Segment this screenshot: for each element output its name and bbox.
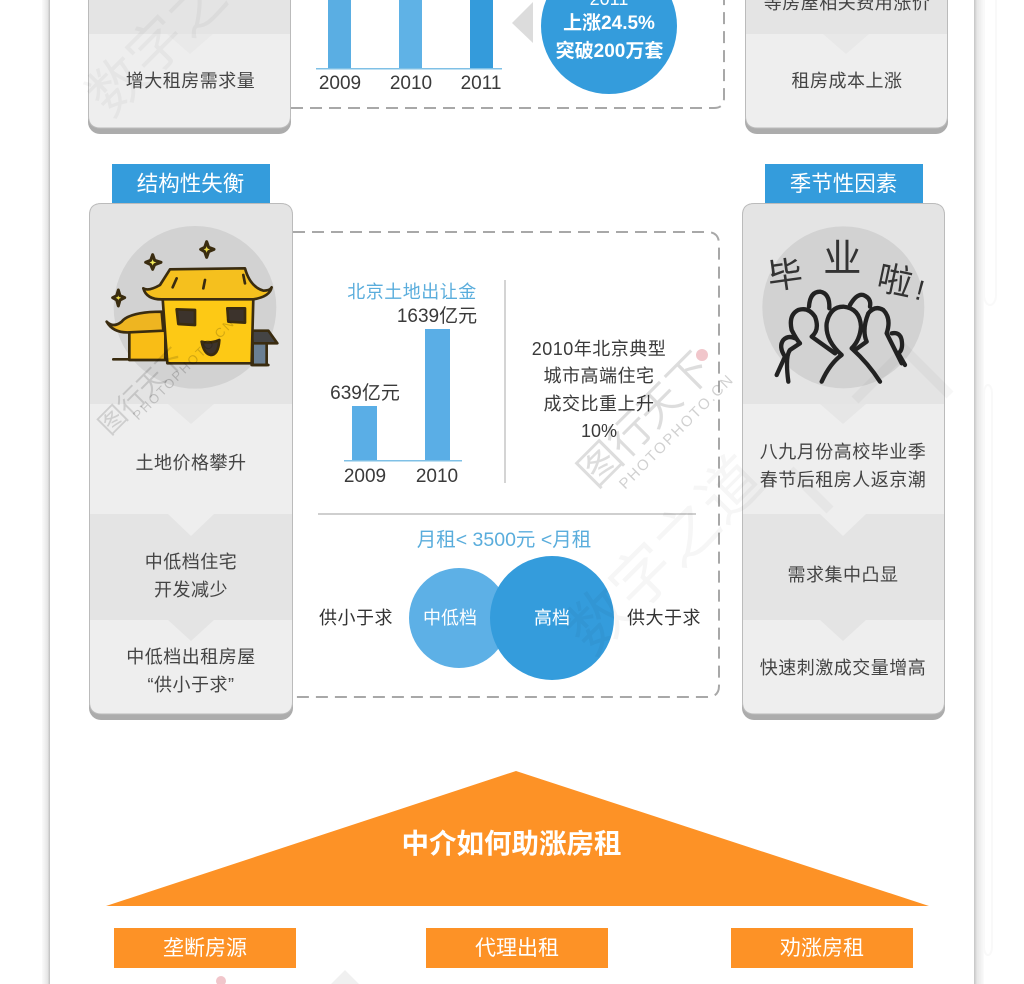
box: agency leasing: 代理出租 [475, 937, 559, 960]
text: boosts transaction volume: 快速刺激成交量增高 [760, 658, 926, 678]
heading: structural imbalance: 结构性失衡 [137, 172, 244, 196]
diagram: mid-low and high-end circles [319, 556, 701, 680]
text: land prices climb: 土地价格攀升 [136, 453, 246, 473]
dashed frame: middle section [293, 232, 719, 697]
text: high-end housing share: 10% [581, 421, 617, 441]
icon: graduates crowd: ! [912, 274, 928, 307]
divider vertical [504, 280, 506, 483]
text: high-end housing share: 成交比重上升 [544, 394, 654, 414]
watermarks: PHOTOPHOTO.CN [616, 371, 738, 493]
bar chart: Beijing land sales revenue: 2009 [344, 466, 386, 487]
bar chart: Beijing land sales revenue: 北京土地出让金 [347, 282, 477, 302]
text: concentrated demand: 需求集中凸显 [788, 565, 898, 585]
icon: graduates crowd: 业 [823, 238, 861, 281]
bar chart: Beijing land sales revenue: 2010 [416, 466, 458, 487]
callout: 2011 rise circle: 突破200万套 [556, 39, 663, 62]
icon: graduates crowd: 啦 [874, 258, 916, 304]
box: encourage rent rises: 劝涨房租 [780, 937, 864, 960]
watermarks: 数字之道 [553, 443, 778, 668]
bar chart: Beijing land sales revenue [330, 282, 477, 487]
panel: structural imbalance chain [89, 203, 293, 720]
text: graduation season and post-festival return [760, 442, 926, 490]
text: fewer mid-low housing developments: 中低档住宅 [145, 552, 237, 572]
heading: seasonal factors: 季节性因素 [790, 172, 897, 196]
panel: seasonal factors chain [742, 203, 945, 720]
bar chart: 2009 to 2011: 2011 [461, 73, 501, 94]
dashed frame: top section [291, 0, 724, 108]
icon: graduates crowd: 毕 [765, 254, 805, 298]
diagram: mid-low and high-end circles: 供大于求 [627, 608, 701, 628]
panel: top left cause [88, 0, 291, 134]
text: increased rental demand: 增大租房需求量 [126, 71, 255, 91]
text: graduation season and post-festival return: 八九月份高校毕业季 [760, 442, 926, 462]
box: monopolise listings: 垄断房源 [163, 937, 247, 960]
box: agency leasing [426, 928, 608, 968]
box: encourage rent rises [731, 928, 913, 968]
icon: graduates crowd [762, 226, 928, 388]
box: monopolise listings [114, 928, 296, 968]
panel: top right cause: 租房成本上涨 [792, 71, 902, 91]
arrow: points to chart [512, 2, 533, 43]
bar chart: 2009 to 2011 [316, 0, 502, 94]
icon: yellow house [107, 226, 277, 389]
divider horizontal [318, 513, 696, 515]
diagram: mid-low and high-end circles: 供小于求 [319, 608, 393, 628]
text: rent threshold: 月租< 3500元 <月租 [417, 529, 591, 551]
text: high-end housing share [532, 339, 666, 441]
watermarks: 图行天下 [569, 344, 721, 496]
callout: 2011 rise circle: 上涨24.5% [563, 12, 655, 34]
heading: structural imbalance [112, 164, 270, 203]
banner: how agents push up rents [106, 771, 929, 906]
bar chart: Beijing land sales revenue: 639亿元 [330, 382, 400, 404]
text: mid-low rental short supply: 中低档出租房屋 [126, 647, 256, 667]
heading: seasonal factors [765, 164, 923, 203]
text: mid-low rental short supply [126, 647, 256, 695]
bar chart: Beijing land sales revenue: 1639亿元 [397, 305, 477, 327]
watermarks: PHOTOPHOTO.CN [130, 315, 238, 423]
bar chart: 2009 to 2011: 2010 [390, 73, 432, 94]
text: fewer mid-low housing developments [145, 552, 237, 600]
banner: how agents push up rents: 中介如何助涨房租 [402, 828, 622, 859]
text: high-end housing share: 城市高端住宅 [544, 366, 654, 386]
text: fewer mid-low housing developments: 开发减少 [154, 580, 228, 600]
text: mid-low rental short supply: “供小于求” [148, 675, 234, 695]
diagram: mid-low and high-end circles: 高档 [534, 608, 570, 628]
bar chart: 2009 to 2011: 2009 [319, 73, 361, 94]
panel: top right cause [745, 0, 948, 134]
diagram: mid-low and high-end circles: 中低档 [423, 608, 477, 628]
watermarks: 图行天下 [93, 343, 190, 440]
callout: 2011 rise circle [541, 0, 677, 94]
text: high-end housing share: 2010年北京典型 [532, 339, 666, 359]
text: graduation season and post-festival return: 春节后租房人返京潮 [760, 470, 926, 490]
